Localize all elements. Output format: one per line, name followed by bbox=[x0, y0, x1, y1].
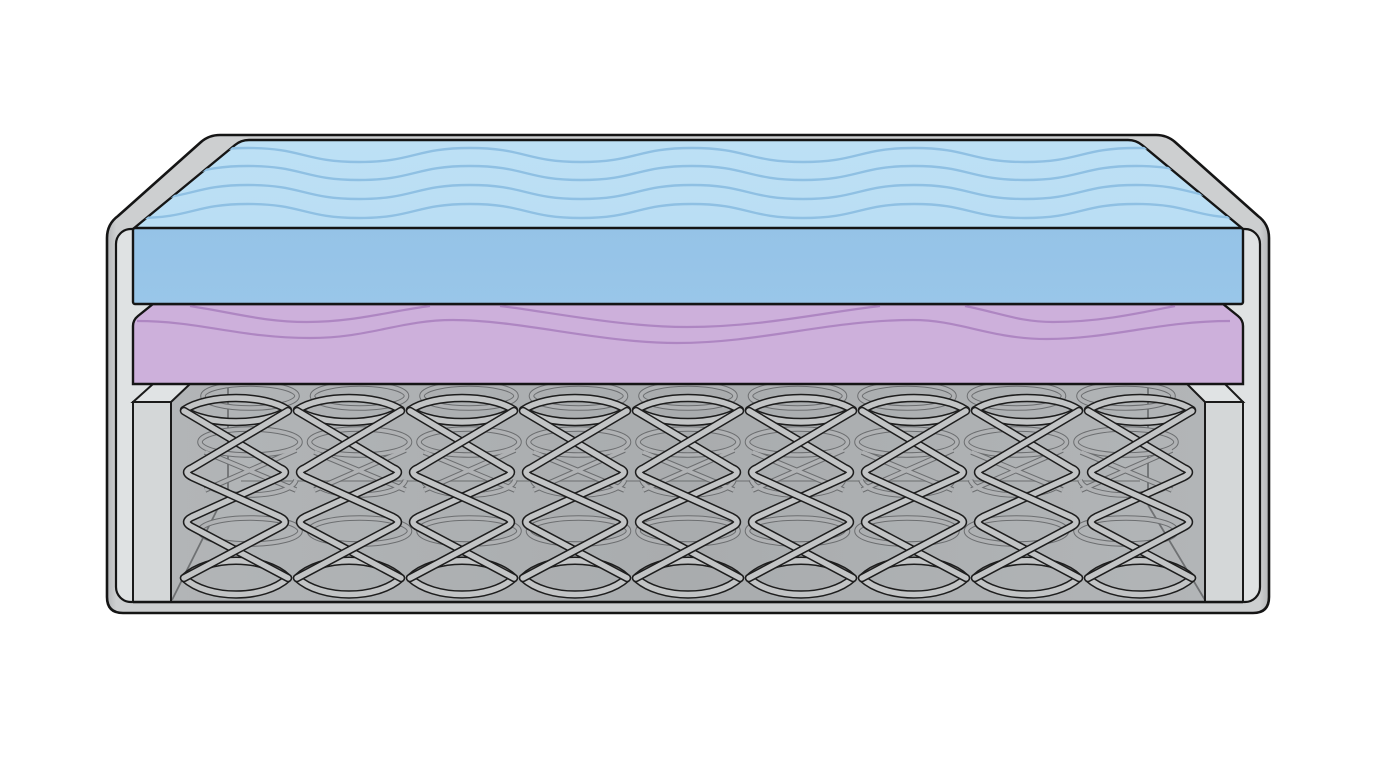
blue surface wave lines bbox=[26, 148, 1247, 218]
purple comfort foam layer bbox=[133, 304, 1243, 384]
spring 7 bbox=[862, 398, 966, 594]
spring 3 bbox=[410, 398, 514, 594]
purple layer wave lines bbox=[137, 306, 1230, 343]
spring 6 bbox=[749, 398, 853, 594]
inner cavity bbox=[116, 229, 1260, 602]
spring compartment back wall bbox=[171, 384, 1205, 602]
spring 5 bbox=[636, 398, 740, 594]
spring 1 bbox=[184, 398, 288, 594]
outer shell bbox=[107, 135, 1269, 613]
mattress cross-section illustration bbox=[106, 134, 1270, 614]
blue foam front face bbox=[133, 228, 1243, 304]
left side support bbox=[133, 384, 190, 602]
front row of springs bbox=[184, 398, 1192, 594]
right side support bbox=[1187, 384, 1243, 602]
spring 4 bbox=[523, 398, 627, 594]
spring 9 bbox=[1088, 398, 1192, 594]
spring 2 bbox=[297, 398, 401, 594]
back row of springs bbox=[200, 384, 1176, 544]
spring compartment floor line bbox=[133, 601, 1243, 603]
spring 8 bbox=[975, 398, 1079, 594]
blue foam top surface bbox=[26, 140, 1247, 229]
